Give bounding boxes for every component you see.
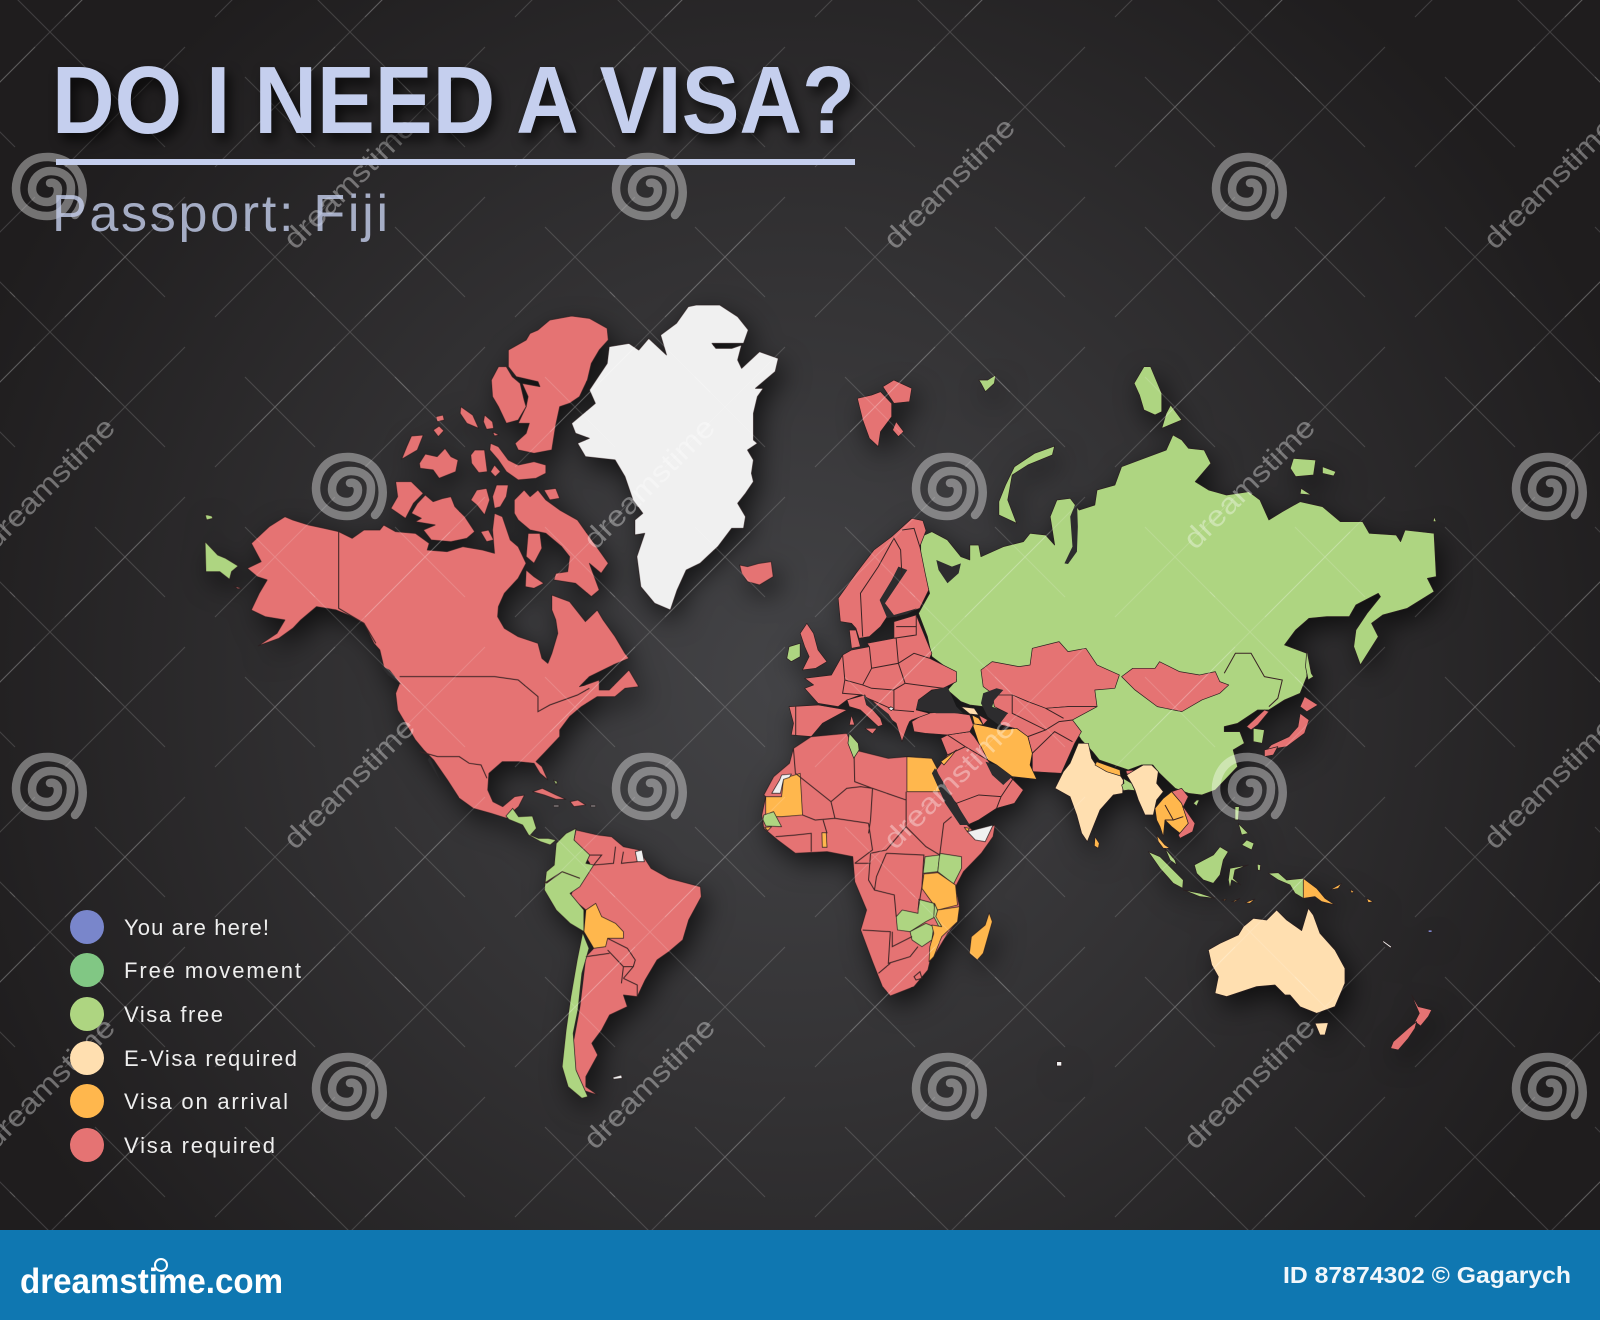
Sri Lanka bbox=[1094, 837, 1099, 848]
Arabia borders bbox=[947, 735, 1014, 808]
Gulf of California bbox=[428, 757, 445, 789]
Sardinia and Sicily bbox=[849, 715, 877, 734]
Vietnam bbox=[1172, 788, 1195, 838]
United Kingdom bbox=[800, 623, 827, 670]
legend item: free movement: Free movement bbox=[124, 958, 301, 983]
world map bbox=[205, 305, 1436, 1098]
legend item: visa on arrival: Visa on arrival bbox=[124, 1089, 288, 1114]
legend bbox=[70, 910, 301, 1162]
Caribbean islands bbox=[532, 780, 596, 807]
Colombia, Ecuador, Peru bbox=[544, 828, 594, 932]
Central Asia, Afghanistan, Pakistan bbox=[992, 695, 1097, 773]
Gulf of Ob bbox=[1064, 500, 1078, 564]
footer image ID and credit: ID 87874302 © Gagarych bbox=[1283, 1262, 1571, 1288]
Madagascar bbox=[969, 913, 992, 960]
Somalia bbox=[967, 825, 993, 842]
Malawi bbox=[934, 903, 944, 928]
Tunisia bbox=[848, 733, 859, 758]
Malay Peninsula bbox=[1157, 835, 1177, 865]
Egypt bbox=[907, 757, 942, 792]
Uganda bbox=[923, 855, 940, 873]
Greenland bbox=[572, 305, 778, 610]
Bangladesh bbox=[1122, 778, 1135, 791]
continental Europe bbox=[805, 615, 956, 742]
Africa borders bbox=[776, 748, 952, 980]
French Guiana bbox=[635, 850, 644, 862]
Turkey bbox=[912, 712, 973, 735]
legend item: visa free: Visa free bbox=[124, 1002, 223, 1027]
Thailand, Laos, Cambodia bbox=[1155, 792, 1188, 837]
Pacific inlet bbox=[380, 665, 402, 685]
China border bbox=[1224, 653, 1282, 707]
Scandinavia bbox=[838, 518, 929, 638]
legend item: visa free bbox=[70, 997, 223, 1031]
Mauritania bbox=[766, 773, 803, 817]
Scandinavia borders bbox=[860, 528, 920, 637]
watermark text: dreamstime bbox=[578, 1012, 722, 1156]
Ireland bbox=[787, 643, 800, 662]
Mongolia bbox=[1122, 662, 1229, 712]
Chile bbox=[562, 933, 589, 1098]
Japan bbox=[1264, 697, 1318, 757]
West African orange states bbox=[765, 827, 969, 847]
Zambia bbox=[896, 899, 936, 932]
watermark text: dreamstime bbox=[1178, 1012, 1322, 1156]
White Sea bbox=[936, 560, 961, 583]
Iran bbox=[972, 723, 1037, 779]
Nepal bbox=[1095, 762, 1121, 776]
title underline bbox=[56, 159, 855, 165]
Russia and China bbox=[918, 435, 1436, 795]
Western Sahara bbox=[772, 774, 791, 793]
Iceland bbox=[740, 562, 773, 585]
Indochina borders bbox=[1165, 805, 1183, 820]
legend item: visa on arrival bbox=[70, 1084, 288, 1118]
Senegal bbox=[763, 812, 782, 827]
Red Sea bbox=[932, 768, 970, 825]
North America borders bbox=[339, 532, 589, 778]
watermark text: dreamstime bbox=[578, 412, 722, 556]
South America borders bbox=[544, 847, 637, 997]
Indonesia bbox=[1148, 847, 1303, 898]
Philippines bbox=[1235, 807, 1254, 850]
Canadian Arctic islands bbox=[391, 316, 608, 597]
Bering islands bbox=[205, 514, 241, 589]
watermark text: dreamstime bbox=[878, 112, 1022, 256]
Caucasus bbox=[961, 707, 988, 725]
New Zealand bbox=[1391, 995, 1432, 1050]
Falkland Islands bbox=[613, 1075, 622, 1079]
map region: Europe, Russia and Asia bbox=[787, 367, 1436, 825]
small white state bbox=[889, 707, 894, 711]
Persian Gulf bbox=[985, 762, 1012, 785]
Black Sea bbox=[916, 687, 963, 713]
Central America bbox=[506, 808, 556, 845]
Arctic islands bbox=[979, 367, 1436, 523]
Caspian Sea bbox=[981, 688, 1008, 725]
map region: North America and Greenland bbox=[205, 305, 778, 818]
Africa continent bbox=[762, 733, 995, 996]
Myanmar bbox=[1127, 765, 1163, 815]
Kenya bbox=[938, 853, 961, 884]
India bbox=[1055, 743, 1123, 842]
Central Asia borders bbox=[1012, 695, 1072, 753]
Papua New Guinea bbox=[1303, 878, 1335, 905]
Denmark bbox=[849, 630, 860, 648]
watermark spirals bbox=[16, 157, 1583, 1116]
Europe borders bbox=[796, 615, 943, 735]
legend item: e-visa required bbox=[70, 1041, 297, 1075]
legend item: you are here bbox=[70, 910, 269, 944]
watermark text: dreamstime bbox=[878, 712, 1022, 856]
Tasmania bbox=[1315, 1023, 1328, 1035]
legend item: free movement bbox=[70, 953, 301, 987]
Australia bbox=[1208, 908, 1345, 1013]
legend item: e-visa required: E-Visa required bbox=[124, 1046, 297, 1071]
map region: South America, Caribbean and Africa bbox=[506, 733, 995, 1098]
Iberian Peninsula bbox=[789, 705, 847, 737]
map region: South and Southeast Asia, Oceania bbox=[1055, 743, 1432, 1066]
Arabian Peninsula and Levant bbox=[936, 732, 1023, 825]
title: DO I NEED A VISA? bbox=[52, 47, 855, 154]
Adriatic Sea bbox=[864, 695, 894, 723]
South America red countries bbox=[570, 830, 701, 1095]
Svalbard bbox=[857, 380, 912, 447]
Bolivia bbox=[584, 903, 623, 948]
watermark text: dreamstime bbox=[1178, 412, 1322, 556]
Gulf of Bothnia bbox=[880, 567, 917, 618]
Tanzania bbox=[922, 873, 958, 910]
Kazakhstan bbox=[981, 642, 1119, 713]
Italy bbox=[847, 695, 883, 727]
legend item: visa required: Visa required bbox=[124, 1133, 275, 1158]
Mozambique bbox=[929, 907, 959, 962]
Hainan bbox=[1193, 800, 1199, 806]
subtitle: Passport: Fiji bbox=[52, 185, 388, 243]
legend item: you are here: You are here! bbox=[124, 915, 269, 940]
legend item: visa required bbox=[70, 1128, 275, 1162]
watermark text: dreamstime bbox=[278, 112, 422, 256]
watermark text bbox=[0, 112, 1600, 1156]
footer band bbox=[0, 1230, 1600, 1320]
footer logo: dreamstime.com bbox=[20, 1262, 283, 1301]
North America mainland bbox=[247, 513, 639, 818]
white and blue small islands bbox=[1057, 930, 1432, 1066]
Jordan bbox=[941, 750, 956, 765]
Bhutan bbox=[1126, 770, 1136, 774]
Sakhalin bbox=[1306, 650, 1314, 680]
South Korea bbox=[1253, 728, 1264, 743]
watermark text: dreamstime bbox=[278, 712, 422, 856]
Zimbabwe bbox=[910, 923, 934, 947]
orange Pacific islands bbox=[1222, 883, 1373, 903]
North Korea bbox=[1247, 710, 1269, 730]
